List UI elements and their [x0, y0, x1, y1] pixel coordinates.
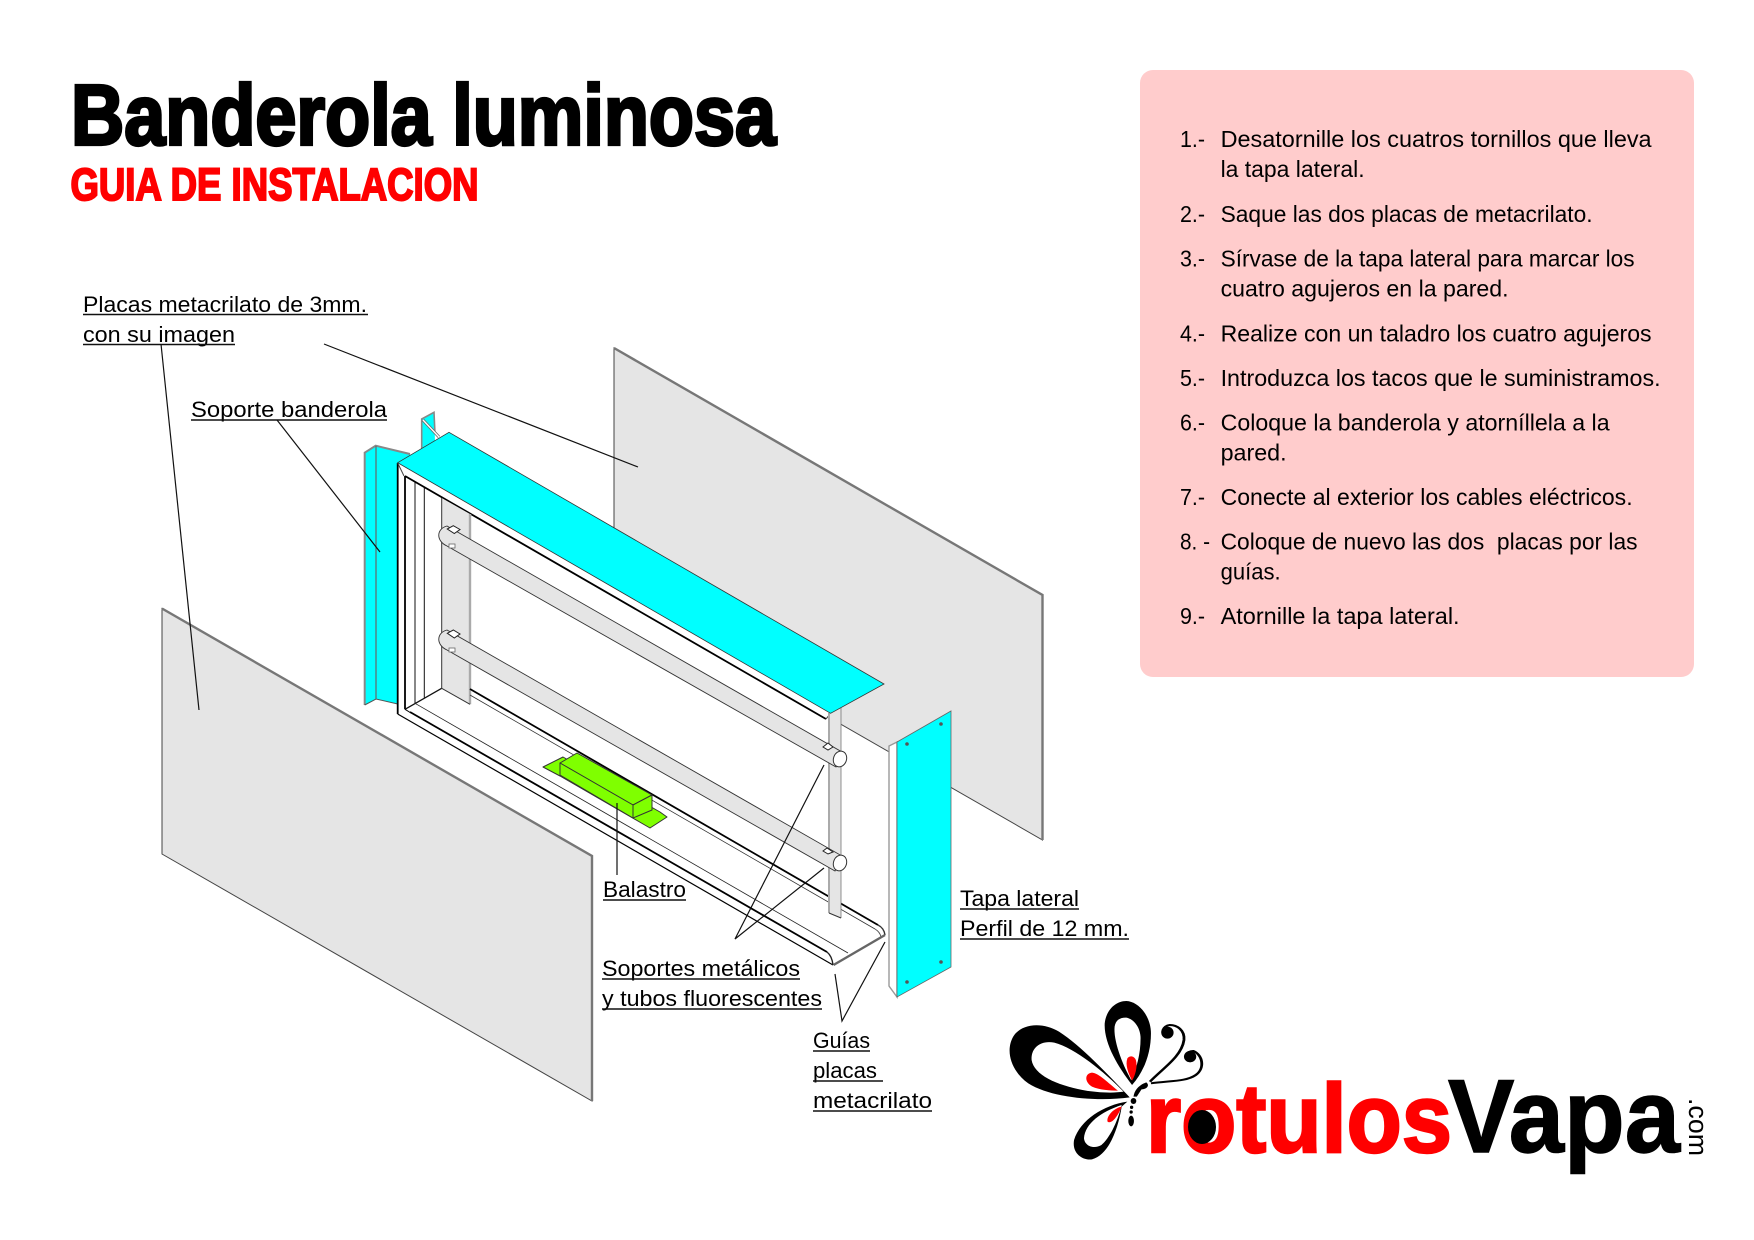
wordmark: Vapa: Vapa: [1448, 1059, 1681, 1175]
step 4: 4.-: [1180, 320, 1205, 346]
icon: butterfly: [1010, 1001, 1202, 1159]
label: guias placas metacrilato: metacrilato: [813, 1088, 932, 1113]
left inner support strip: [442, 498, 470, 704]
back acrylic plate: [614, 348, 1042, 840]
label: placas metacrilato: [83, 292, 368, 347]
label: tapa lateral: [960, 886, 1129, 941]
label: guias placas metacrilato: [813, 1028, 932, 1113]
label: soportes metalicos: [602, 956, 822, 1011]
label: guias placas metacrilato: placas: [813, 1058, 877, 1083]
subtitle: GUIA DE INSTALACION: [70, 159, 478, 210]
step 1: [1180, 126, 1652, 182]
step 6: pared.: [1221, 440, 1287, 466]
first o black centre: [1188, 1110, 1216, 1144]
step 8: 8. -: [1180, 528, 1210, 554]
label: placas metacrilato: Placas metacrilato de 3mm.: [83, 292, 367, 317]
label: tapa lateral: Perfil de 12 mm.: [960, 916, 1129, 941]
label: placas metacrilato: con su imagen: [83, 322, 235, 347]
step 5: Introduzca los tacos que le suministramos.: [1221, 365, 1661, 391]
wordmark: rotulos: rotulos: [1146, 1064, 1452, 1173]
wordmark: .com: .com: [1683, 1098, 1713, 1156]
step 1: la tapa lateral.: [1221, 156, 1365, 182]
fluorescent tube lower: [439, 630, 849, 873]
step 7: 7.-: [1180, 484, 1205, 510]
step 6: 6.-: [1180, 410, 1205, 436]
step 4: Realize con un taladro los cuatro agujeros: [1221, 320, 1652, 346]
step 3: cuatro agujeros en la pared.: [1221, 276, 1509, 302]
label: tapa lateral: Tapa lateral: [960, 886, 1079, 911]
logo: [1010, 1001, 1713, 1175]
exploded diagram: [162, 348, 1042, 1101]
support bracket back tab: [422, 412, 439, 450]
step 5: 5.-: [1180, 365, 1205, 391]
step 1: Desatornille los cuatros tornillos que lleva: [1221, 126, 1652, 152]
support bracket left flange: [365, 446, 412, 705]
front acrylic plate: [162, 608, 592, 1101]
step 2: 2.-: [1180, 201, 1205, 227]
label: balastro: Balastro: [603, 877, 686, 902]
label: soportes metalicos: Soportes metálicos: [602, 956, 800, 981]
step 2: Saque las dos placas de metacrilato.: [1221, 201, 1593, 227]
leader lines: [161, 344, 885, 1021]
label: soporte banderola: Soporte banderola: [191, 397, 387, 422]
right metal support strip: [829, 708, 841, 918]
step 9: 9.-: [1180, 603, 1205, 629]
label: soportes metalicos: y tubos fluorescentes: [602, 986, 822, 1011]
step 3: [1180, 246, 1635, 302]
step 3: 3.-: [1180, 246, 1205, 272]
frame body: [398, 463, 885, 965]
label: guias placas metacrilato: Guías: [813, 1028, 870, 1053]
side cover profile: [889, 711, 951, 997]
ballast: [543, 753, 667, 828]
step 1: 1.-: [1180, 126, 1205, 152]
step 8: guías.: [1221, 558, 1281, 584]
step 8: [1180, 528, 1638, 584]
title: Banderola luminosa: [71, 68, 777, 164]
step 7: Conecte al exterior los cables eléctricos.: [1221, 484, 1633, 510]
panel: installation steps: [1140, 70, 1694, 677]
fluorescent tube upper: [439, 526, 849, 769]
cyan top cover: [398, 432, 884, 713]
tray and guides: [398, 689, 885, 965]
step 8: Coloque de nuevo las dos placas por las: [1221, 528, 1638, 554]
step 3: Sírvase de la tapa lateral para marcar los: [1221, 246, 1635, 272]
step 9: Atornille la tapa lateral.: [1221, 603, 1460, 629]
step 6: [1180, 410, 1610, 466]
step 6: Coloque la banderola y atorníllela a la: [1221, 410, 1610, 436]
